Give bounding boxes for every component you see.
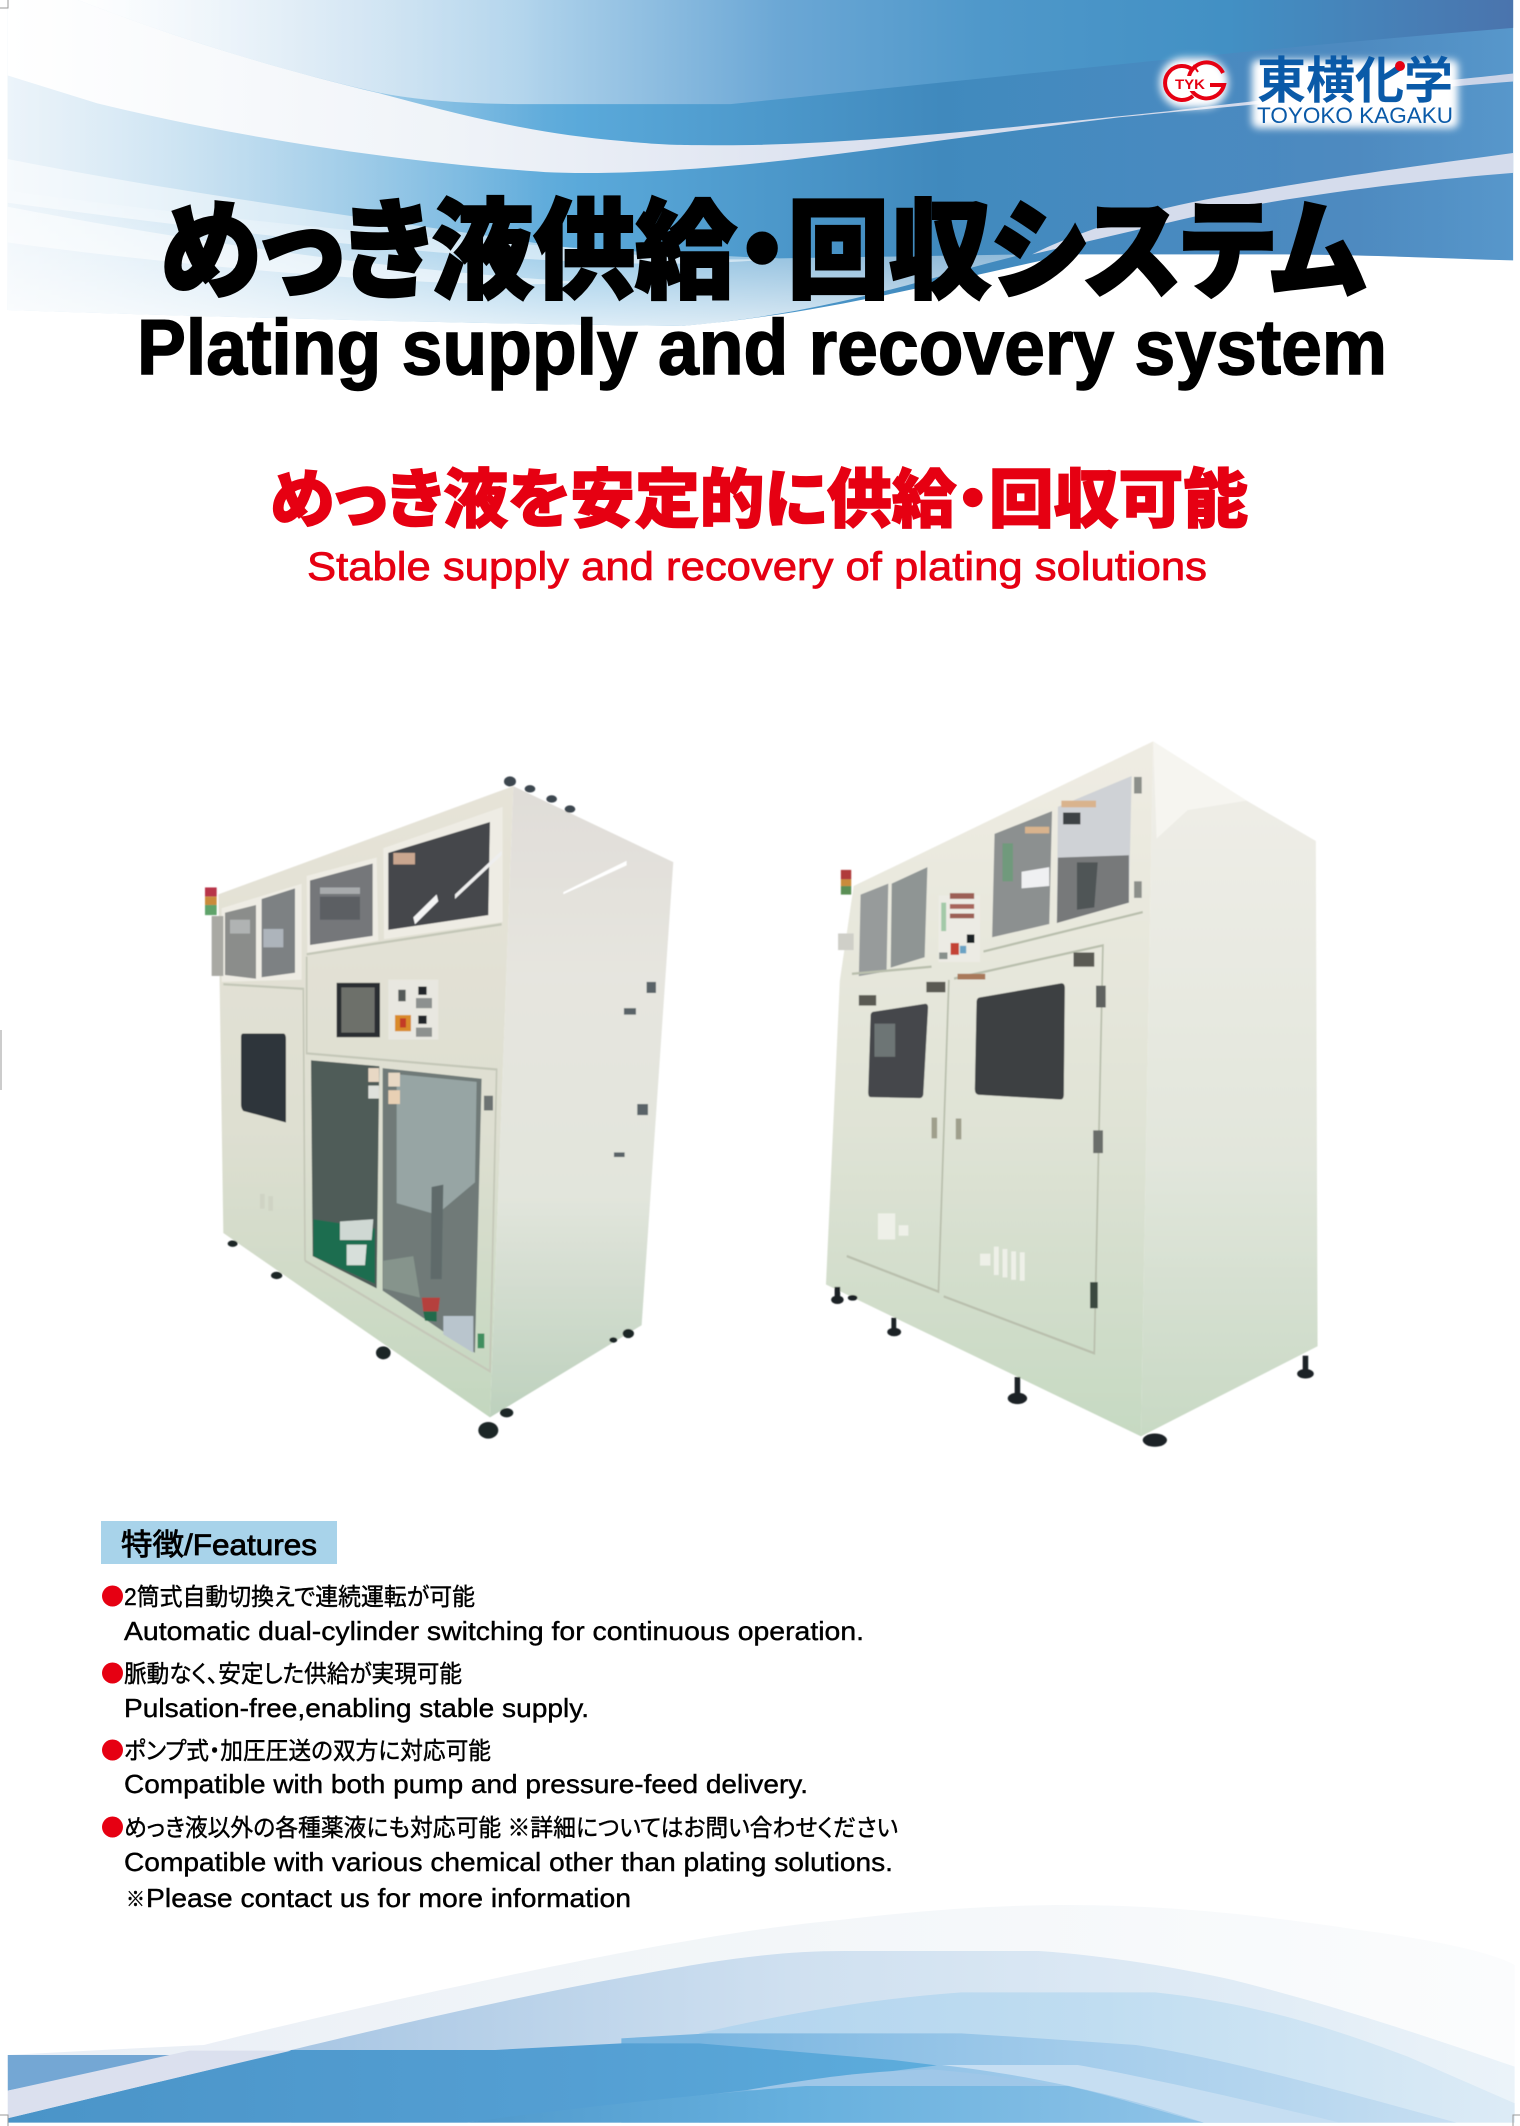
upper windows (859, 776, 1142, 976)
door windows (868, 983, 1065, 1100)
feature 4 (102, 1815, 898, 1913)
feature 4: めっき液以外の各種薬液にも対応可能 ※詳細についてはお問い合わせください (124, 1815, 898, 1842)
features list (102, 1584, 898, 1913)
top knobs (504, 776, 575, 813)
feature 2: Pulsation-free,enabling stable supply. (124, 1693, 589, 1723)
icon: red dot (1395, 61, 1405, 71)
vents (878, 1213, 1025, 1281)
feature 4: Please contact us for more information (146, 1883, 631, 1913)
feature 4: Compatible with various chemical other than plating solutions. (124, 1847, 893, 1877)
feature 2 (102, 1661, 589, 1723)
logo Japanese name: 東横化学 (1257, 53, 1453, 109)
icon: TYK logo mark: TYK (1175, 76, 1205, 92)
title English: Plating supply and recovery system (137, 303, 1387, 391)
door lines (223, 924, 502, 1371)
upper windows (225, 822, 502, 979)
top wave background (8, 0, 1513, 330)
icon: TYK logo mark (1165, 62, 1224, 100)
feature 1 (102, 1584, 864, 1646)
photo: machine right (826, 741, 1318, 1447)
features heading: 特徴/Features (121, 1529, 317, 1562)
feature 2: 脈動なく、安定した供給が実現可能 (124, 1661, 462, 1688)
bottom wave background (8, 1905, 1515, 2123)
stickers and hinges (859, 952, 1106, 1308)
photo: machine left (205, 776, 673, 1439)
feature 3: Compatible with both pump and pressure-feed delivery. (124, 1769, 808, 1799)
side door window (241, 1034, 286, 1122)
control buttons (388, 980, 438, 1040)
subtitle English: Stable supply and recovery of plating solutions (307, 545, 1207, 589)
control panel (938, 893, 980, 962)
title Japanese: めっき液供給・回収システム (160, 191, 1366, 312)
signal tower (205, 887, 223, 976)
features heading (101, 1521, 337, 1564)
upper window frames (222, 807, 503, 982)
side stickers (614, 982, 656, 1157)
lower windows with equipment (311, 1060, 493, 1353)
feature 3: ポンプ式・加圧圧送の双方に対応可能 (124, 1738, 491, 1765)
subtitle Japanese: めっき液を安定的に供給・回収可能 (270, 464, 1248, 536)
company logo (1160, 53, 1458, 128)
machine feet (831, 1287, 1314, 1447)
feature 3 (102, 1738, 808, 1799)
door lines (847, 912, 1143, 1353)
feature 4: ※ (126, 1889, 145, 1911)
feature 1: 2筒式自動切換えで連続運転が可能 (124, 1584, 475, 1611)
feature 1: Automatic dual-cylinder switching for continuous operation. (124, 1616, 864, 1646)
logo English name: TOYOKO KAGAKU (1257, 103, 1453, 128)
vents (260, 1194, 273, 1211)
signal tower (838, 870, 854, 950)
touch panel (337, 983, 380, 1037)
machine feet (228, 1240, 634, 1439)
